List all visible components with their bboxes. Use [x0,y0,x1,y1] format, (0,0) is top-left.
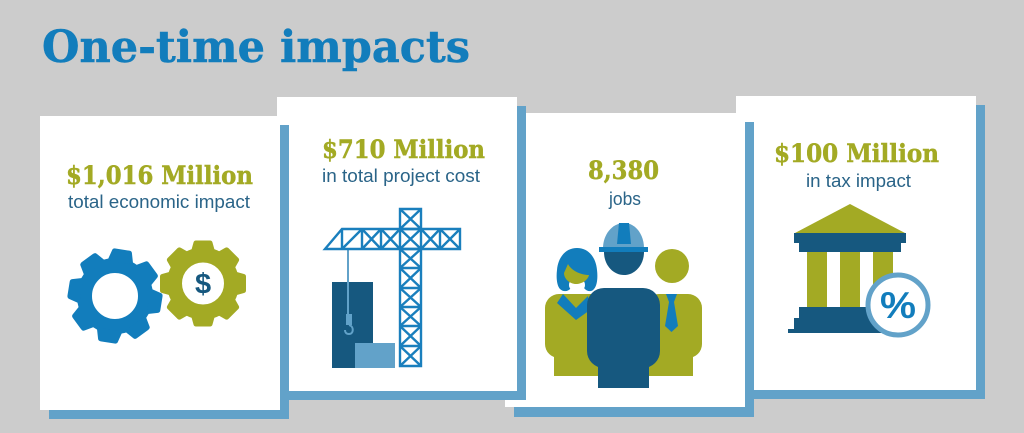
panel: jobs [505,113,754,417]
panel: project cost [277,97,526,400]
panel: tax impact [736,96,985,399]
icon: olive dollar gear: $ [195,268,211,300]
title: One-time impacts [42,22,470,73]
value: economic impact: $1,016 Million [66,161,253,190]
icon: olive dollar gear [160,240,246,326]
value: jobs: 8,380 [588,156,659,185]
caption: jobs: jobs [608,188,641,209]
value: project cost: $710 Million [322,135,485,164]
icon: three workers [545,223,702,388]
icon: bank with percent badge [788,204,928,335]
icon: construction crane [325,209,460,368]
icon: blue gear [67,248,163,344]
value: tax: $100 Million [774,139,939,168]
caption: economic impact: total economic impact [68,191,250,212]
caption: tax: in tax impact [806,170,911,191]
panel: economic impact [40,116,289,419]
icon: bank with percent badge: % [880,285,916,326]
caption: project cost: in total project cost [322,165,480,186]
